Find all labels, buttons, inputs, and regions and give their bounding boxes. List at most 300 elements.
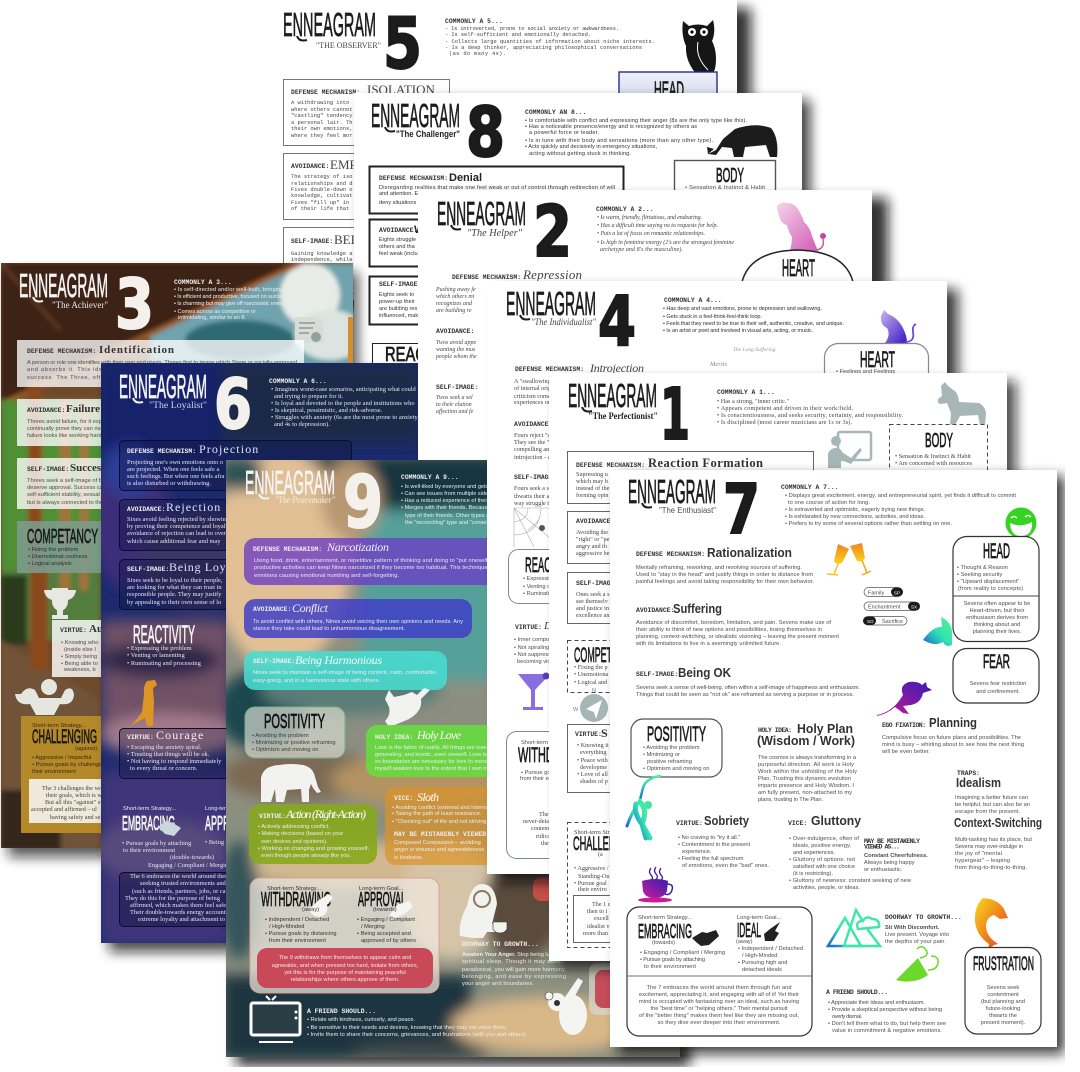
defense box 5: "castling" tendency	[291, 113, 353, 119]
defense box 5: a personal lair. Th	[291, 120, 352, 126]
virtue panel 6: to every threat or concern.	[130, 765, 198, 772]
heart box 4	[824, 344, 928, 414]
reactivity: • Venting or lamenting	[127, 652, 185, 659]
a friend should 7	[826, 989, 946, 1034]
commonly an 8: • Acts quickly and decisively in emergency situations,	[525, 144, 657, 150]
commonly a 7: • Is extraverted and optimistic, eagerly trying new things.	[785, 507, 925, 513]
title 9	[245, 460, 383, 544]
reactivity box 4: • Venting or	[523, 584, 552, 590]
title 1: ENNEAGRAM	[568, 377, 657, 414]
embracing ideal box: the "best time" or "helping others." Their mental pursuit	[650, 1006, 788, 1012]
title 6	[119, 365, 252, 445]
avoidance text 4: introjection - a	[514, 454, 551, 461]
virtue block 7: experience.	[682, 849, 712, 855]
self image panel 9: Being Harmonious	[295, 653, 382, 667]
defense panel 9: productive activities can keep Nines narcotized if they become too habitual. This technique of	[254, 565, 494, 571]
holy idea block: am fully present, non-attached to my	[758, 790, 852, 796]
virtue box 1	[568, 724, 668, 792]
icon: teacher	[828, 432, 871, 468]
virtue panel 6: • Trusting that things will be ok.	[127, 751, 210, 758]
virtue panel 3: • Being able to	[61, 661, 98, 667]
avoidance box 1: "right" or "pe	[576, 536, 610, 543]
virtue panel 9: Action (Right-Action)	[285, 807, 366, 821]
avoidance block 7: planning, context-switching, or idealistic visioning – leaving the present moment	[636, 634, 839, 640]
strategy row 6: • Being	[205, 839, 225, 846]
defense panel 6: DEFENSE MECHANISM:	[127, 448, 196, 455]
holy idea panel 9: Love is the fabric of reality. All things are love.	[375, 745, 489, 751]
commonly an 8: • Is comfortable with conflict and expressing their anger (8s are the only type like this).	[525, 118, 747, 124]
commonly an 8: a powerful force or leader.	[529, 130, 599, 136]
avoidance box 5: EMPTINESS	[330, 157, 401, 172]
avoidance panel 3: Failure	[66, 403, 100, 415]
challenging box 1: (a	[598, 851, 603, 858]
heart box 4: HEART	[860, 347, 895, 372]
icon: lion	[777, 202, 826, 251]
commonly an 8	[525, 109, 747, 157]
ego fixation block: EGO FIXATION:	[882, 722, 926, 729]
embracing ideal box: / High-Minded	[742, 953, 777, 959]
strategy row 6: EMBRACING	[122, 813, 175, 835]
title 6: "The Loyalist"	[149, 400, 207, 410]
embracing ideal box: Long-term Goal...	[737, 915, 782, 921]
vice panel 9: • "Checking out" of life and not striving	[392, 819, 487, 825]
frustration box: contentment	[987, 992, 1019, 998]
defense box 5: DEFENSE MECHANISM:	[291, 89, 360, 96]
self image box 1	[568, 572, 668, 624]
avoidance panel 9: Conflict	[292, 601, 329, 615]
doorway to growth 7	[885, 914, 962, 945]
strategy panel 9: Long-term Goal...	[359, 886, 404, 892]
title 3	[19, 265, 154, 345]
commonly a 9: • Is well-liked by everyone and gets along with	[401, 484, 515, 490]
virtue box 1: S	[601, 726, 608, 740]
self image panel 9: SELF-IMAGE:	[253, 658, 295, 665]
virtue text 4: • Not spiraling	[514, 645, 549, 651]
embracing ideal box: EMBRACING	[638, 921, 692, 943]
defense text 4: A "swallowing	[514, 378, 551, 385]
commonly a 6: • Imagines worst-case scenarios, anticipating what could	[271, 386, 417, 393]
avoidance box 1: angry and th	[576, 543, 608, 550]
defense panel 6	[120, 440, 352, 490]
head box	[953, 536, 1039, 642]
summary panel 6	[120, 872, 352, 926]
sheet: Enneagram 8 The Challenger	[354, 93, 810, 390]
defense box 8: Denial	[449, 172, 482, 184]
defense box 8: Disregarding realities that make one feel weak or out of control through redirection of will	[379, 185, 615, 191]
avoidance box 5: relationships and d	[291, 181, 352, 187]
faint diagram labels: Merits	[709, 361, 727, 368]
self image text 2	[436, 384, 478, 415]
positivity panel 9: • Minimizing or positive reframing	[252, 740, 336, 746]
commonly a 6: COMMONLY A 6...	[269, 378, 327, 385]
self image box 5: BEING	[334, 232, 374, 247]
self image panel 3: deserve approval. Success can be	[27, 485, 114, 491]
traps block: TRAPS:	[957, 770, 980, 777]
holy idea block: Holy Plan	[797, 722, 853, 736]
head box	[619, 72, 717, 132]
body box 1: • Sensation & Instinct & Habit	[895, 453, 971, 460]
self image box 1: see themselv	[576, 598, 609, 605]
self image block 7: Being OK	[678, 666, 731, 680]
commonly a 1: COMMONLY A 1...	[717, 389, 775, 396]
sheet: Enneagram 6 The Loyalist: REACTIVITY	[133, 621, 195, 649]
virtue panel 3: (inside else I	[64, 647, 96, 653]
self image box 8: Eights seek to	[379, 292, 414, 298]
self image box 1: and justice in	[576, 605, 609, 612]
icon: pointing hand	[764, 922, 780, 941]
commonly a 5	[445, 18, 655, 57]
head box: HEAD	[983, 540, 1010, 563]
virtue text 4	[514, 620, 560, 665]
competancy panel: • Unemotional coolness	[28, 554, 88, 560]
challenging panel: Short-term Strategy...	[32, 723, 86, 729]
defense box 1: Supressing u	[576, 471, 608, 478]
icon: meerkat	[130, 680, 157, 726]
self image text 4: way struggle to	[514, 500, 552, 507]
avoidance box 8: others and tha	[379, 244, 416, 250]
virtue panel 6: VIRTUE:	[127, 734, 154, 741]
title 9: ENNEAGRAM	[245, 464, 335, 501]
commonly an 8: COMMONLY AN 8...	[525, 109, 586, 116]
sheet: Enneagram 2 The Helper	[418, 190, 888, 478]
defense panel 3	[17, 340, 304, 387]
avoidance text 4: Fours reject "su	[514, 432, 553, 439]
avoidance box 8: Eights struggle	[379, 237, 416, 243]
commonly a 4: • Gets stuck in a feel-think-feel-think loop.	[663, 314, 762, 320]
competancy panel	[17, 521, 147, 573]
traps block: from thing-to-thing-to-thing.	[955, 865, 1027, 871]
withdrawing box 4: WITHDRAWING	[518, 744, 598, 767]
traps block: the joy of "mental	[955, 851, 1002, 857]
summary panel 6: extreme loyalty and attachment to	[138, 916, 225, 923]
positivity panel 9	[245, 707, 345, 758]
holy idea block: Plan. Trusting this dynamic evolution	[758, 776, 851, 782]
virtue box 1: VIRTUE:	[575, 731, 602, 738]
strategy panel 9: / Merging	[361, 924, 385, 930]
defense text 2: Repression	[522, 267, 582, 282]
defense text 4: experiences or	[514, 399, 550, 406]
defense panel 9: Narcotization	[326, 540, 389, 554]
strategy row 6	[122, 806, 253, 869]
avoidance text 4: AVOIDANCE:	[514, 421, 552, 428]
vice panel 9: MAY BE MISTAKENLY VIEWED AS:	[394, 831, 501, 838]
summary panel 6: They do this for the purpose of being	[125, 895, 221, 902]
defense panel 3: DEFENSE MECHANISM:	[27, 348, 96, 355]
icon: certificate	[295, 317, 323, 343]
virtue block 7: of emotions, even the "bad" ones.	[682, 863, 769, 869]
strategy panel 9: agreeable, and when pressed too hard, isolate from others,	[272, 963, 419, 969]
head box: Heart-driven, but their	[969, 608, 1025, 614]
virtue panel 9: VIRTUE:	[259, 813, 286, 820]
defense text 2: are building re	[436, 308, 472, 314]
may be mistakenly viewed as: VIEWED AS...	[864, 844, 900, 850]
competancy box 1: • Logical and	[574, 679, 608, 686]
avoidance text 2: wanting the mus	[436, 347, 476, 353]
doorway to growth 9: belonging, and ease by expressing	[462, 974, 566, 980]
vice panel 9: • Avoiding conflict (external and internal)	[392, 805, 492, 811]
self image text 4: SELF-IMAGE:	[514, 474, 556, 481]
self image panel 9: easy-going, and in a harmonious state with others.	[253, 678, 380, 684]
head box: enthusiasm derives from	[966, 615, 1028, 621]
positivity box: POSITIVITY	[647, 723, 706, 746]
avoidance box 5: The strategy of iso	[291, 174, 352, 180]
commonly a 4: • Is an artist or poet and involved in visual arts, acting, or music.	[663, 328, 813, 334]
challenging panel: CHALLENGING	[32, 727, 97, 748]
avoidance panel 3: Threes avoid failure, for it exposes them.	[27, 419, 130, 425]
self image panel 6: Sixes seek to be loyal to their people,	[127, 577, 223, 584]
icon: compass: N	[592, 688, 596, 694]
self image box 8	[370, 276, 490, 324]
commonly a 5: (as do many 4s).	[449, 51, 506, 57]
self image panel 9	[244, 651, 447, 690]
positivity panel 9: • Avoiding the problem	[252, 733, 309, 739]
instinct pills: Family	[868, 590, 884, 596]
withdrawing box 4: their	[541, 840, 552, 847]
commonly a 9: type of their friends. Other types are	[405, 513, 494, 519]
virtue box 1: • Knowing it	[577, 742, 609, 749]
defense box 1: DEFENSE MECHANISM:	[576, 462, 645, 469]
defense box 8: DEFENSE MECHANISM:	[379, 175, 448, 182]
icon: map pin and cup	[460, 884, 507, 938]
avoidance panel 3: AVOIDANCE:	[27, 407, 65, 414]
doorway to growth 9: Awaken Your Anger. Stop being lulled	[462, 952, 558, 958]
vice block 7: activities, people, or ideas.	[793, 885, 860, 891]
defense block 7: painful feelings and avoid taking responsibility for their own behavior.	[636, 579, 814, 585]
icon: coffee cup	[638, 867, 672, 902]
avoidance box 8: AVOIDANCE:	[379, 227, 417, 234]
traps block	[954, 770, 1042, 871]
icon: kangaroo	[877, 682, 932, 716]
challenging box 1	[568, 822, 668, 948]
commonly a 2: archetype and 8's the masculine).	[600, 246, 683, 253]
virtue panel 6: • Escaping the anxiety spiral.	[127, 744, 202, 751]
self image text 2: affection and fe	[436, 408, 474, 415]
embracing ideal box: The 7 embraces the world around them through fun and	[646, 985, 792, 991]
a friend should 7: • Provide a skeptical perspective without being	[828, 1007, 942, 1013]
summary panel 6: The 6 embraces the world around them,	[130, 873, 232, 880]
commonly a 7: COMMONLY A 7...	[781, 484, 839, 491]
avoidance panel 6: Rejection	[166, 500, 221, 514]
challenging panel: • Aggressive / Impactful	[32, 755, 91, 761]
challenging panel: The 3 challenges the wor	[42, 785, 104, 792]
defense box 8	[370, 166, 624, 214]
reactivity box 4: • Ruminating	[523, 591, 555, 597]
commonly a 2: • Is warm, friendly, flirtatious, and endearing.	[597, 214, 702, 221]
vice block 7: and experiences.	[793, 850, 835, 856]
title 4: "The Individualist"	[531, 317, 596, 327]
positivity box: • Avoiding the problem	[643, 745, 700, 751]
reactivity box 4: REACTIVITY	[525, 554, 580, 577]
a friend should 7: overly dismal.	[832, 1014, 862, 1020]
title 8: ENNEAGRAM	[371, 97, 460, 134]
commonly a 5: - Collects large quantities of information about niche interests.	[445, 39, 655, 45]
frustration box: thwarts the	[989, 1013, 1017, 1019]
avoidance text 4	[514, 421, 553, 461]
defense panel 3: success. The Three, often without knowing it, becomes the role.	[27, 375, 227, 381]
doorway to growth 9	[462, 941, 566, 987]
embracing ideal box: • Pursue goals by attaching	[640, 957, 705, 963]
commonly a 4: COMMONLY A 4...	[664, 297, 722, 304]
competancy panel: • Logical analysis	[28, 561, 72, 567]
defense panel 6: such feelings. But when one feels afra	[127, 473, 225, 480]
title 5: ENNEAGRAM	[283, 6, 376, 43]
self image panel 3: SELF-IMAGE:	[27, 466, 69, 473]
challenging panel: having safety and self-	[50, 814, 106, 821]
avoidance panel 6	[120, 500, 352, 550]
challenging box 1: then to i	[587, 908, 608, 915]
sheet: Enneagram 6 The Loyalist: APPROVAL	[205, 813, 253, 835]
challenging box 1: • Pursue goal	[574, 880, 607, 887]
faint diagram labels: The Long Suffering	[733, 346, 776, 353]
avoidance panel 6: by proving their competence and loyalty	[127, 523, 231, 530]
head box: • Seeking security	[957, 572, 1002, 578]
defense block 7: Mentally reframing, reworking, and resolving sources of suffering.	[636, 565, 802, 571]
avoidance block 7: Avoidance of discomfort, boredom, limitation, and pain. Sevens make use of	[636, 620, 831, 626]
title 4: ENNEAGRAM	[506, 285, 596, 322]
holy idea block: plans, trusting in The Plan.	[758, 797, 823, 803]
faint diagram labels	[709, 346, 776, 368]
virtue panel 6: Courage	[156, 728, 204, 742]
strategy row 6: Engaging / Compliant / Merging	[148, 862, 232, 869]
virtue box 1: • Love of all	[577, 771, 608, 778]
avoidance panel 9: To avoid conflict with others, Nines avoid voicing their own opinions and needs. Any	[253, 619, 463, 625]
commonly an 8: • Is in tune with their body and sensations (more than any other type).	[525, 138, 713, 144]
body box 8	[674, 160, 776, 220]
defense panel 9: emotions causing emotional numbing and self-forgetting.	[254, 573, 399, 579]
traps block: be helpful, but can also be an	[955, 802, 1030, 808]
strategy row 6: to their environment	[123, 847, 175, 854]
virtue block 7: • Feeling the full spectrum	[678, 856, 744, 862]
defense box 8: deny situations	[379, 200, 417, 206]
holy idea block: imparts presence and Holy Wisdom. I	[758, 783, 854, 789]
avoidance panel 6: AVOIDANCE:	[127, 506, 165, 513]
title 7: "The Enthusiast"	[659, 506, 716, 515]
vice block 7: • Gluttony of newness: constant seeking of new	[789, 878, 912, 884]
defense text 4: of internal orig	[514, 385, 551, 392]
title 6: 6	[214, 365, 252, 445]
doorway to growth 7: Live present. Voyage into	[885, 932, 949, 938]
strategy row 6: (double-towards)	[170, 854, 214, 861]
icon: butterfly	[923, 617, 952, 646]
defense box 1: forming opin	[576, 492, 608, 499]
avoidance text 4: compelling and	[514, 446, 553, 453]
avoidance text 2: people whom the	[435, 354, 477, 360]
self image box 5: SELF-IMAGE:	[291, 238, 333, 245]
vice block 7	[788, 814, 920, 891]
embracing ideal box	[627, 907, 812, 1036]
a friend should 9: A FRIEND SHOULD...	[307, 1008, 376, 1015]
traps block: Imagining a better future can	[955, 795, 1028, 801]
embracing ideal box: to their environment	[644, 964, 696, 970]
icon: strongman	[15, 679, 74, 715]
strategy row 6: • Pursue goals by attaching	[122, 840, 192, 847]
challenging panel: But all this "against" ene	[45, 799, 107, 806]
embracing ideal box: • Engaging / Compliant / Merging	[640, 950, 725, 956]
strategy panel 9: / High-Minded	[269, 924, 304, 930]
frustration box: Sevens seek	[987, 985, 1019, 991]
holy idea panel 9	[366, 725, 556, 777]
icon: rhino	[707, 125, 777, 157]
fear box: FEAR	[983, 652, 1010, 673]
vice panel 9: anger is virtuous and agreeableness	[394, 847, 484, 853]
positivity box: positive reframing	[647, 759, 692, 765]
avoidance box 1: AVOIDANCE:	[576, 518, 614, 525]
strategy panel 9: • Independent / Detached	[265, 917, 329, 923]
avoidance panel 9: stance they take could lead to unharmonious disagreement.	[253, 626, 405, 632]
body box 8: • Sensation & Instinct & Habit	[685, 185, 765, 191]
commonly a 1: • Appears competent and driven in their work/field.	[717, 405, 853, 412]
commonly a 9: • Has a reduced experience of their own	[401, 498, 500, 504]
virtue panel 3: Au	[89, 623, 103, 635]
sheet: Enneagram 3 The Achiever	[0, 263, 365, 857]
strategy panel 9: • Being accepted and	[357, 931, 411, 937]
holy idea panel 9: Holy Love	[416, 728, 462, 742]
commonly a 4: • Feels that they need to be true to their self, authentic, creative, and unique.	[663, 321, 844, 327]
embracing ideal box: • Independent / Detached	[738, 946, 803, 952]
defense box 1: which may b	[576, 478, 608, 485]
avoidance box 8: Weakness	[414, 224, 468, 236]
avoidance box 5: of their life that	[291, 206, 349, 212]
commonly a 7: • Is exhilarated by new connections, activities, and ideas.	[785, 514, 925, 520]
ego fixation block: will be even better.	[881, 749, 930, 755]
self image text 4: thwarts their a	[514, 493, 550, 500]
ego fixation block: mind is busy – whirling about to see how the next thing	[882, 742, 1024, 748]
withdrawing box 4: Short-term Strategy	[521, 740, 571, 746]
may be mistakenly viewed as: MAY BE MISTAKENLY	[864, 838, 920, 845]
avoidance text 2: AVOIDANCE:	[436, 328, 474, 335]
self image box 1: excellence an	[576, 612, 610, 619]
virtue panel 3: • Knowing who	[61, 640, 98, 646]
background: porch and sky	[0, 263, 365, 850]
a friend should 9	[307, 1008, 527, 1038]
icon: champagne glasses	[827, 543, 871, 575]
may be mistakenly viewed as: Constant Cheerfulness.	[864, 853, 928, 859]
self image panel 6: responsible people. They may justify	[127, 591, 222, 598]
title 5	[283, 3, 422, 85]
title 7	[628, 470, 760, 550]
title 8	[371, 93, 505, 173]
summary panel 6: (such as friends, partners, jobs, or causes).	[132, 888, 241, 895]
title 4: 4	[598, 282, 636, 362]
positivity box: • Minimizing or	[643, 752, 680, 758]
self image block 7: Sevens seek a sense of well-being, often within a self-image of happiness and enthusiasm.	[636, 685, 860, 691]
holy idea block	[757, 722, 857, 803]
defense panel 3: and absorbs it. This identification with a successful image often feeds their need for	[27, 367, 297, 373]
holy idea block: (Wisdom / Work)	[757, 734, 855, 748]
self image text 4	[514, 474, 556, 507]
icon: martini	[518, 672, 550, 710]
virtue block 7: Sobriety	[704, 814, 749, 828]
commonly a 9: • Merges with their friends. Because of this	[401, 505, 507, 511]
defense text 4	[514, 361, 644, 406]
virtue box 1: shades of p	[580, 778, 608, 785]
title 2: "The Helper"	[467, 228, 523, 239]
commonly a 2: • Puts a lot of focus on romantic relationships.	[597, 230, 705, 237]
challenging panel: their goals, which is why	[46, 792, 109, 799]
icon: fish	[975, 898, 1008, 950]
summary panel 6: affirmed, which makes them feel safe.	[130, 902, 228, 909]
frustration box	[965, 948, 1041, 1034]
body box 8: BODY	[716, 165, 744, 187]
commonly a 5: - Is introverted, prone to social anxiety or awkwardness.	[445, 26, 619, 32]
head box: planning their lives.	[973, 629, 1022, 635]
defense block 7: DEFENSE MECHANISM:	[636, 551, 705, 558]
title 2: 2	[533, 191, 572, 273]
virtue box 1: everything	[580, 749, 606, 756]
traps block: hypergear" – leaping	[955, 858, 1010, 864]
traps block: Sevens may over-indulge in	[955, 844, 1023, 850]
commonly a 1: • Has a strong, "inner critic."	[717, 398, 789, 405]
